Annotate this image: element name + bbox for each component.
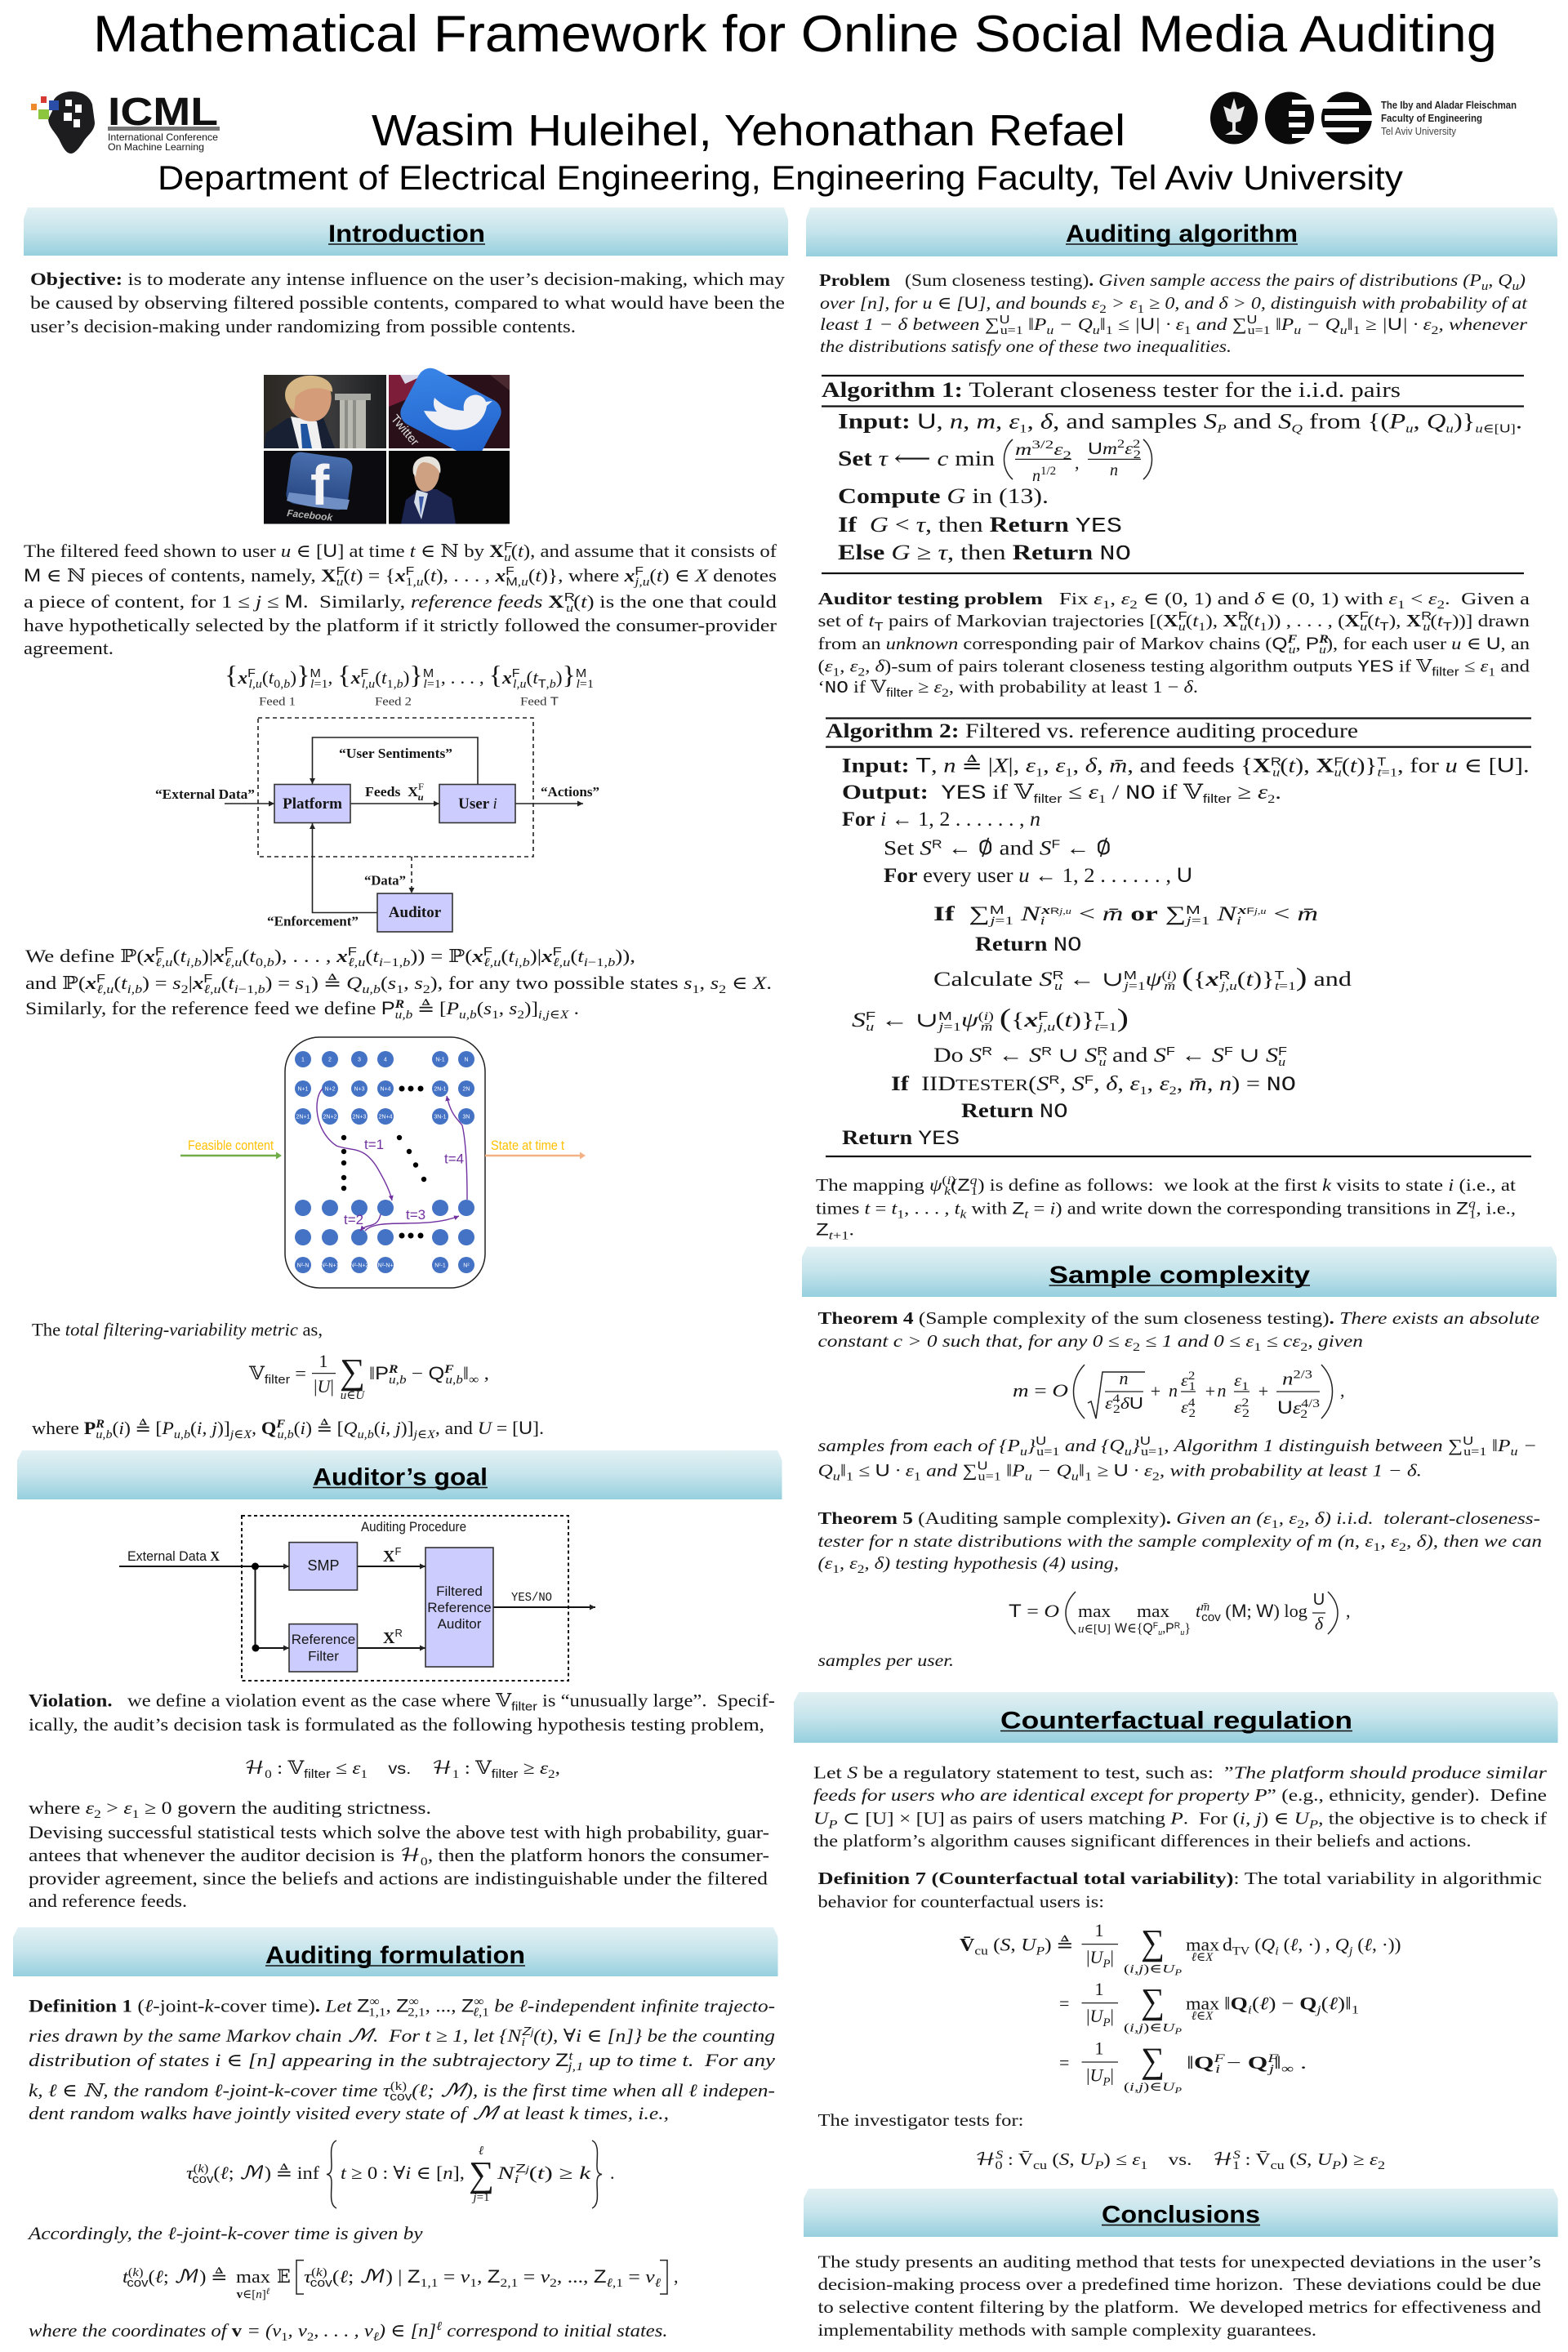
heading: introduction: Introduction xyxy=(328,220,485,247)
text: definition 1: distribution of states i ∈ [n] appearing in the subtrajectory Ztj,1 up to time t. For any xyxy=(29,2050,775,2074)
text: theorem 4: constant c > 0 such that, for any 0 ≤ ε 2 ≤ 1 and 0 ≤ ε 1 ≤ cε 2, given xyxy=(818,1331,1363,1354)
equation: sample complexity m: ε22 xyxy=(1234,1396,1250,1420)
equation: cover time expectation: max xyxy=(236,2266,270,2287)
equation: joint cover time: ∑ xyxy=(469,2154,494,2194)
equation: V filter: 𝕍filter = xyxy=(248,1363,306,1387)
algorithm 2 box: Output: YES if 𝕍 filter ≤ ε1 / NO if 𝕍 filter ≥ ε2. xyxy=(842,782,1281,806)
equation: V filter xyxy=(248,1351,489,1402)
panel: introduction xyxy=(24,207,788,1441)
node labels: 2N+1 xyxy=(296,1114,310,1120)
heading: auditing formulation: Auditing formulation xyxy=(265,1942,525,1969)
equation: joint cover time: . xyxy=(610,2163,614,2183)
equation: V filter: u∈U xyxy=(341,1389,365,1402)
text: violation: ically, the audit’s decision task is formulated as the following hypothesis testing problem, xyxy=(29,1714,764,1735)
panel: conclusions xyxy=(804,2189,1558,2340)
text: samples per user: samples per user. xyxy=(818,1650,954,1670)
equation: counterfactual total variability: = xyxy=(1059,1993,1069,2014)
logo: ICML xyxy=(31,91,220,154)
text: accordingly: Accordingly, the ℓ-joint-k-cover time is given by xyxy=(27,2223,423,2243)
text: theorem 4: Theorem 4 (Sample complexity of the sum closeness testing) . There exists an absolute xyxy=(818,1308,1539,1328)
equation: cover time expectation: t(k)cov(ℓ; ℳ) ≜ xyxy=(122,2266,227,2290)
text: problem statement: least 1 − δ between ∑ Uu=1 ‖P u − Q u‖1 ≤ | U| · ε 1 and ∑ Uu=1 ‖P u − Q u‖1 ≥ | U| · ε 2, whenever xyxy=(820,313,1528,337)
node labels: N+3 xyxy=(354,1086,365,1093)
text: theorem 5: Theorem 5 (Auditing sample complexity) . Given an (ε 1, ε2, δ) i.i.d. tolerant-closeness- xyxy=(818,1508,1540,1531)
equation: sample complexity m xyxy=(1013,1365,1344,1421)
equation: counterfactual total variability xyxy=(960,1920,1401,2096)
algorithm 2 box: Input: T, n ≜ | X|, ε1, ε1, δ, m̄, and feeds { X Ru(t), X Fu(t)} Tt=1, for u ∈ [ U]. xyxy=(842,754,1530,779)
text: regulatory statement: feeds for users who are identical except for property P ” (e.g., ethnicity, gender). Define xyxy=(813,1785,1547,1805)
node labels: 2N-1 xyxy=(434,1086,447,1093)
text: filtered feed definition: M ∈ ℕ pieces of contents, namely, XFu(t) = { xF1,u(t), . . . , xFM,u(t)}, where xFj,u(t) ∈ X denotes xyxy=(24,564,777,589)
heading: auditing algorithm xyxy=(806,207,1557,256)
text: regulatory statement xyxy=(813,1763,1548,1851)
logo: Tel Aviv University xyxy=(1210,91,1517,144)
arrow: state at time t: State at time t xyxy=(491,1138,564,1153)
transition arrows t=1 to t=4: t=2 xyxy=(344,1212,363,1227)
heading: sample complexity xyxy=(802,1246,1557,1297)
node labels: N-1 xyxy=(435,1057,445,1063)
node labels: N²-N+1 xyxy=(321,1263,339,1269)
algorithm 2 box: Set SR ← ∅ and SF ← ∅ xyxy=(884,838,1111,859)
text: mapping definition: The mapping ψ(i)k(Zq1) is define as follows: we look at the first k visits to state i (i.e., at xyxy=(816,1174,1516,1198)
equation: sample complexity m: ε21 xyxy=(1181,1370,1196,1393)
equation: V filter: |U| xyxy=(314,1376,334,1396)
node labels: N²-1 xyxy=(434,1263,446,1269)
equation: sample size T: , xyxy=(1346,1601,1351,1621)
equation: counterfactual total variability: V̄cu (S, UP) ≜ xyxy=(960,1934,1073,1958)
node labels: N+1 xyxy=(297,1086,309,1093)
algorithm 1 box xyxy=(822,376,1524,573)
algorithm 2 box xyxy=(826,719,1531,1156)
equation: sample size T: δ xyxy=(1315,1614,1324,1633)
algorithm 2 box: Calculate SRu ← ∪ Mj=1ψ (i)m̄ ({xRj,u(t)} Tt=1) and xyxy=(933,962,1352,993)
text: conclusions: decision-making process over a predefined time horizon. These deviations could be due xyxy=(818,2274,1541,2294)
text: conclusions: The study presents an auditing method that tests for unexpected deviations in the user’s xyxy=(818,2252,1541,2272)
heading: counterfactual regulation xyxy=(794,1692,1558,1743)
arrow: feasible content: Feasible content xyxy=(188,1138,274,1153)
equation: sample size T: W∈{QFu,PRu} xyxy=(1115,1620,1191,1637)
box: user: User i xyxy=(458,795,497,813)
diagram: platform user auditor block diagram: “Actions” xyxy=(541,784,599,800)
equation: sample size T: max xyxy=(1078,1601,1111,1621)
text: objective xyxy=(30,269,785,336)
equation: sample complexity m: ε42 xyxy=(1181,1396,1196,1420)
algorithm 1 box: Input: U, n, m, ε1, δ, and samples SP and SQ from {( P u, Q u)} u∈[ U]. xyxy=(838,408,1522,436)
algorithm 2 box: S Fu ← ∪ Mj=1ψ (i)m̄ ({x Fj,u(t)} Tt=1) xyxy=(852,1003,1129,1034)
diagram: auditing procedure block diagram xyxy=(119,1516,595,1681)
box: filtered reference auditor: Auditor xyxy=(438,1616,482,1632)
text: auditor testing problem xyxy=(818,589,1530,700)
equation: sample complexity m: Uε4/32 xyxy=(1277,1397,1320,1421)
text: auditor testing problem: from an unknown corresponding pair of Markov chains ( QFu, PRu), for each user u ∈ U, an xyxy=(818,633,1530,657)
text: regulatory statement: UP ⊂ [U] × [U] as pairs of users matching P. For ( i, j) ∈ UP, the objective is to check if xyxy=(813,1809,1547,1832)
equation: joint cover time xyxy=(186,2140,614,2208)
photo: facebook app icon: Facebook xyxy=(287,507,334,523)
text: theorem 5: tester for n state distributions with the sample complexity of m (n, ε 1, ε 2, δ), then we can xyxy=(818,1531,1542,1554)
text: conclusions xyxy=(818,2252,1542,2340)
text: violation xyxy=(29,1690,775,1735)
equation: feed sequence: Feed T xyxy=(520,694,559,709)
text: definition 1 xyxy=(29,1995,775,2123)
equation: sample complexity m: ε42δU xyxy=(1105,1392,1143,1416)
box: platform xyxy=(274,784,350,823)
text: definition 1: Definition 1 (ℓ-joint- k-cover time) . Let Z∞1,1, Z∞2,1, ..., Z∞ℓ,1 be ℓ-independent infinite trajecto- xyxy=(29,1995,775,2019)
algorithm 1 box: Compute G in (13). xyxy=(838,484,1049,508)
equation: counterfactual total variability: ∑ xyxy=(1141,1922,1165,1962)
set tau line with fractions: , xyxy=(1075,452,1080,473)
equation: sample complexity m: + xyxy=(1151,1381,1160,1401)
equation: counterfactual total variability: |UP| xyxy=(1086,2006,1114,2029)
diagram: auditing procedure block diagram: Auditing Procedure xyxy=(361,1519,466,1535)
equation: counterfactual total variability: max xyxy=(1186,1993,1219,2014)
text: objective: user’s decision-making under randomizing from possible contents. xyxy=(30,316,576,336)
equation: feed sequence xyxy=(225,660,594,709)
node labels: N²-N xyxy=(297,1263,309,1269)
diagram: auditing procedure block diagram: YES/NO xyxy=(511,1591,552,1605)
box: SMP: SMP xyxy=(307,1557,340,1574)
set tau line with fractions: Set τ ⟵ c min xyxy=(838,447,995,470)
text: definition 1: ries drawn by the same Markov chain ℳ. For t ≥ 1, let {N iZj(t), ∀i ∈ [n]} be the counting xyxy=(29,2025,775,2049)
node labels: 1 xyxy=(301,1057,305,1063)
algorithm 2 box: If ∑ Mj=1 N ix R j,u < m̄ or ∑ Mj=1 N ix F j,u < m̄ xyxy=(933,903,1318,928)
transition arrows t=1 to t=4: t=4 xyxy=(444,1152,464,1166)
box: user xyxy=(439,784,515,823)
diagram: markov chain state grid xyxy=(180,1037,586,1288)
algorithm 1 box: Else G ≥ τ, then Return NO xyxy=(838,541,1131,566)
equation: V filter: ‖PRu,b − QFu,b‖∞ , xyxy=(369,1363,489,1387)
text: strictness and tests: Devising successful statistical tests which solve the above test with high probability, guar- xyxy=(29,1822,769,1842)
logo: ICML: ICML xyxy=(108,91,218,134)
text: filtered feed definition xyxy=(24,540,777,658)
text: strictness and tests: and reference feeds. xyxy=(29,1891,187,1911)
heading: auditor's goal xyxy=(17,1450,782,1499)
text: filtered feed definition: The filtered feed shown to user u ∈ [U] at time t ∈ ℕ by XFu(t), and assume that it consists of xyxy=(24,540,777,564)
equation: cover time expectation: v∈[n]ℓ xyxy=(237,2287,270,2301)
node labels: N² xyxy=(463,1263,470,1269)
photo: facebook app icon xyxy=(264,451,386,524)
diagram: auditing procedure block diagram: XR xyxy=(383,1627,403,1647)
equation: counterfactual total variability: 1 xyxy=(1094,2038,1104,2058)
diagram: platform user auditor block diagram: “Data” xyxy=(364,872,406,889)
equation: feed sequence: {xFl,u(t0,b)}Ml=1, {xFl,u(t1,b)}Ml=1, . . . , {xFl,u(tT,b)}Ml=1 xyxy=(225,660,594,691)
equation: counterfactual total variability: ∑ xyxy=(1141,1981,1165,2021)
affiliation: Department of Electrical Engineering, Engineering Faculty, Tel Aviv University xyxy=(158,158,1403,197)
text: problem statement xyxy=(819,270,1528,356)
heading: auditor's goal: Auditor’s goal xyxy=(313,1463,488,1491)
equation: cover time expectation xyxy=(122,2261,678,2301)
algorithm 2 box: Return NO xyxy=(975,933,1081,957)
logo: Tel Aviv University: Tel Aviv University xyxy=(1381,125,1456,137)
node labels: N²-N+2 xyxy=(350,1263,368,1269)
box: reference filter: Reference xyxy=(292,1632,355,1647)
text: auditor testing problem: Auditor testing problem Fix ε1, ε2 ∈ (0, 1) and δ ∈ (0, 1) with ε1 < ε2. Given a xyxy=(818,589,1530,612)
node labels xyxy=(296,1057,470,1269)
text: objective: Objective: is to moderate any intense influence on the user’s decision-making, which may xyxy=(30,269,785,289)
node labels: 3 xyxy=(358,1057,361,1063)
equation: counterfactual total variability: 1 xyxy=(1094,1979,1104,1999)
heading: counterfactual regulation: Counterfactual regulation xyxy=(1000,1707,1352,1735)
heading: conclusions: Conclusions xyxy=(1102,2202,1260,2229)
text: problem statement: over [n], for u ∈ [ U], and bounds ε 2 > ε 1 ≥ 0, and δ > 0, distinguish with probability of at xyxy=(820,293,1528,316)
algorithm 1 box: If G < τ, then Return YES xyxy=(838,513,1122,538)
heading: conclusions xyxy=(804,2189,1558,2237)
authors: Wasim Huleihel, Yehonathan Refael xyxy=(372,106,1125,155)
node labels: N²-N+3 xyxy=(378,1263,396,1269)
set tau line with fractions: n xyxy=(1110,461,1118,479)
text: theorem 5 xyxy=(818,1508,1542,1576)
text: definition 7: behavior for counterfactual users is: xyxy=(818,1892,1104,1912)
set tau line with fractions: n1/2 xyxy=(1032,465,1056,485)
diagram: platform user auditor block diagram: Feeds XF u xyxy=(365,781,424,803)
diagram: platform user auditor block diagram: “External Data” xyxy=(155,786,255,802)
algorithm 2 box: For i ← 1, 2 . . . . . . , n xyxy=(842,808,1040,831)
photo: facebook app icon: f xyxy=(310,453,330,517)
node labels: N+2 xyxy=(324,1086,336,1093)
text: total filtering variability: The total filtering-variability metric as, xyxy=(32,1320,323,1339)
heading: auditing formulation xyxy=(13,1927,777,1976)
node labels: N xyxy=(464,1057,469,1063)
equation: counterfactual total variability: |UP| xyxy=(1086,1947,1114,1971)
text: violation: Violation. we define a violation event as the case where 𝕍 filter is “unusually large”. Specif- xyxy=(29,1690,775,1714)
box: platform: Platform xyxy=(283,795,342,813)
equation: joint cover time: t ≥ 0 : ∀ i ∈ [n], xyxy=(341,2163,465,2183)
text: investigator tests: The investigator tests for: xyxy=(818,2110,1024,2130)
heading: sample complexity: Sample complexity xyxy=(1049,1262,1310,1289)
heading: auditing algorithm: Auditing algorithm xyxy=(1066,220,1298,247)
panel: sample complexity xyxy=(802,1246,1557,1670)
text: auditor testing problem: set of tT pairs of Markovian trajectories [( XFu(t1), XRu(t1)) , . . . , ( XFu(tT), XRu(tT))] drawn xyxy=(818,609,1530,634)
text: samples from each: samples from each of {P u}Uu=1 and {Q u}Uu=1, Algorithm 1 distinguish between ∑ Uu=1 ‖P u − xyxy=(818,1434,1537,1459)
panel: auditing formulation xyxy=(13,1927,777,2344)
algorithm 2 box: Return YES xyxy=(842,1127,960,1151)
equation: sample size T: max xyxy=(1137,1601,1169,1621)
box: reference filter: Filter xyxy=(308,1649,339,1664)
box: filtered reference auditor: Reference xyxy=(427,1600,492,1615)
panel: auditor's goal xyxy=(17,1450,782,1911)
text: filtered feed definition: a piece of content, for 1 ≤ j ≤ M. Similarly, reference feeds XRu(t) is the one that could xyxy=(24,590,777,615)
equation: feed sequence: Feed 1 xyxy=(259,696,296,709)
equation: V filter: 1 xyxy=(318,1351,328,1371)
logo: Tel Aviv University: Faculty of Engineering xyxy=(1381,112,1482,124)
photo: twitter app icon: Twitter xyxy=(388,412,421,448)
logo: ICML: On Machine Learning xyxy=(108,141,204,153)
equation: sample size T: tm̄cov (M; W) log xyxy=(1196,1601,1307,1624)
text: transition probabilities: We define ℙ( xFℓ,u(ti,b)|xFℓ,u(t0,b), . . . , xFℓ,u(ti−1, b)) = ℙ( xFℓ,u(ti,b)|xFℓ,u(ti−1, b)), xyxy=(25,945,635,969)
algorithm 2 box: Return NO xyxy=(961,1100,1068,1124)
logo: ICML: International Conference xyxy=(108,131,218,143)
box: auditor: Auditor xyxy=(389,904,442,921)
equation: sample size T: U xyxy=(1313,1591,1325,1609)
transition arrows t=1 to t=4 xyxy=(317,1089,467,1231)
equation: hypotheses: ℋ0 : 𝕍 filter ≤ ε1 vs. ℋ 1 : 𝕍 filter ≥ ε2, xyxy=(244,1757,560,1781)
text: mapping definition: times t = t1, . . . , tk with Zt = i) and write down the corresponding transitions in Zq1, i.e., xyxy=(816,1198,1516,1222)
text: initial states: where the coordinates of v = (v 1, v2, . . . , v ℓ) ∈ [n] ℓ correspond to initial states. xyxy=(29,2320,668,2344)
diagram: platform user auditor block diagram: “Enforcement” xyxy=(267,913,359,929)
text: problem statement: Problem (Sum closeness testing) . Given sample access the pairs of distributions (P u, Qu) xyxy=(819,270,1526,293)
node labels: 4 xyxy=(384,1057,387,1063)
diagram: platform user auditor block diagram: “User Sentiments” xyxy=(339,746,452,761)
text: strictness and tests: provider agreement, since the beliefs and actions are indistinguishable under the filtered xyxy=(29,1869,768,1888)
set tau line with fractions xyxy=(838,438,1152,485)
box: filtered reference auditor xyxy=(425,1548,493,1667)
text: definition 1: k, ℓ ∈ ℕ, the random ℓ-joint-k-cover time τ (k)cov(ℓ; ℳ), is the first time when all ℓ indepen- xyxy=(29,2080,775,2104)
equation: counterfactual total variability: max xyxy=(1186,1934,1219,1955)
equation: counterfactual total variability: ℓ∈X xyxy=(1192,1951,1214,1964)
equation: sample size T: T = O xyxy=(1009,1601,1059,1621)
box: auditor xyxy=(377,893,452,932)
diagram: platform user auditor block diagram xyxy=(155,718,599,932)
text: mapping definition: Zt+1. xyxy=(816,1220,854,1243)
photo: twitter app icon xyxy=(388,363,510,461)
photo: man at lectern xyxy=(264,375,386,448)
state nodes xyxy=(295,1051,474,1273)
transition arrows t=1 to t=4: t=1 xyxy=(364,1137,384,1152)
node labels: 2N xyxy=(463,1086,470,1093)
equation: counterfactual total variability: ℓ∈X xyxy=(1192,2010,1214,2023)
node labels: 2N+4 xyxy=(379,1114,393,1120)
set tau line with fractions: m 3/2 ε2 xyxy=(1015,439,1071,462)
panel: auditing algorithm xyxy=(806,207,1557,1243)
text: objective: be caused by observing filtered possible contents, compared to what would have been the xyxy=(30,292,785,313)
equation: counterfactual total variability: ∑ xyxy=(1141,2040,1165,2081)
text: samples from each xyxy=(818,1434,1537,1484)
equation: sample size T xyxy=(1009,1591,1351,1637)
text: filtered feed definition: have hypothetically selected by the platform if it strictly followed the consumer-provider xyxy=(24,615,777,635)
photo: man in dark suit xyxy=(389,451,510,524)
equation: counterfactual total variability: 1 xyxy=(1094,1920,1104,1940)
equation: sample complexity m: + xyxy=(1205,1381,1215,1401)
equation: sample size T: u∈[U] xyxy=(1078,1622,1111,1636)
equation: investigator hypotheses: ℋ S0 : V̄ cu (S, UP) ≤ ε1 vs. ℋ S1 : V̄ cu (S, UP) ≥ ε2 xyxy=(975,2149,1385,2172)
equation: counterfactual total variability: (i,j )∈ U P xyxy=(1124,2022,1182,2037)
equation: sample complexity m: n xyxy=(1169,1380,1178,1401)
equation: counterfactual total variability: = xyxy=(1059,2052,1069,2073)
node labels: 2 xyxy=(328,1057,332,1063)
panel: counterfactual regulation xyxy=(794,1692,1558,2172)
equation: sample complexity m: m = O xyxy=(1013,1380,1068,1401)
heading: introduction xyxy=(24,207,788,256)
text: definition 1: dent random walks have jointly visited every state of ℳ at least k times, i.e., xyxy=(29,2103,669,2123)
equation: counterfactual total variability: |UP| xyxy=(1086,2065,1114,2089)
text: strictness and tests: where ε2 > ε1 ≥ 0 govern the auditing strictness. xyxy=(29,1797,431,1821)
text: filtered feed definition: agreement. xyxy=(24,638,114,658)
equation: cover time expectation: , xyxy=(674,2266,678,2287)
arrow: state at time t xyxy=(485,1138,586,1160)
node labels: N+4 xyxy=(380,1086,391,1093)
text: conclusions: implementability methods with sample complexity guarantees. xyxy=(818,2320,1316,2340)
text: theorem 4 xyxy=(818,1308,1539,1354)
node labels: 3N-1 xyxy=(434,1114,447,1120)
text: transition probabilities xyxy=(25,945,772,1022)
algorithm 2 box: Algorithm 2: Filtered vs. reference auditing procedure xyxy=(826,720,1358,742)
text: regulatory statement: the platform’s algorithm causes significant differences in their beliefs and actions. xyxy=(813,1831,1472,1851)
text: transition probabilities: and ℙ( xFℓ,u(ti,b) = s2|xFℓ,u(ti−1, b) = s1) ≜ Qu,b(s1, s2), for any two possible states s1, s2 ∈ X. xyxy=(25,972,772,996)
text: auditor testing problem: (ε1, ε2, δ)-sum of pairs tolerant closeness testing algorithm outputs YES if 𝕍 filter ≤ ε1 and xyxy=(818,657,1530,679)
text: mapping definition xyxy=(816,1174,1516,1243)
equation: joint cover time: j=1 xyxy=(471,2191,490,2204)
text: auditor testing problem: ‘NO if 𝕍 filter ≥ ε2, with probability at least 1 − δ. xyxy=(818,677,1198,700)
set tau line with fractions: Um2ε22 xyxy=(1088,438,1141,461)
algorithm 2 box: If IID TESTER (SR, SF, δ, ε1, ε2, m̄, n) = NO xyxy=(891,1073,1296,1098)
text: conclusions: to selective content filtering by the platform. We developed metrics for effectiveness and xyxy=(818,2297,1542,2317)
equation: sample complexity m: ε1 xyxy=(1234,1372,1249,1393)
node labels: 3N xyxy=(463,1114,470,1120)
ellipsis dots xyxy=(341,1086,426,1238)
text: theorem 5: (ε1, ε2, δ) testing hypothesis (4) using, xyxy=(818,1553,1119,1576)
equation: sample complexity m: n2/3 xyxy=(1282,1369,1312,1388)
arrow: feasible content xyxy=(180,1138,282,1160)
box: filtered reference auditor: Filtered xyxy=(436,1584,483,1599)
title: Mathematical Framework for Online Social Media Auditing xyxy=(93,6,1497,63)
text: transition probabilities: Similarly, for the reference feed we define PRu,b ≜ [ Pu,b(s1, s2)]i,j∈X . xyxy=(25,998,579,1022)
text: strictness and tests xyxy=(29,1797,769,1911)
text: samples from each: Qu‖1 ≤ U · ε 1 and ∑ Uu=1 ‖P u − Q u‖1 ≥ U · ε 2, with probability at least 1 − δ. xyxy=(818,1459,1422,1484)
transition arrows t=1 to t=4: t=3 xyxy=(406,1207,425,1223)
equation: counterfactual total variability: (i,j )∈ U P xyxy=(1124,1963,1182,1978)
text: definition 7: Definition 7 (Counterfactual total variability) : The total variability in algorithmic xyxy=(818,1869,1542,1888)
equation: counterfactual total variability: ‖Q i(ℓ) − Q j(ℓ)‖1 xyxy=(1224,1993,1359,2017)
text: problem statement: the distributions satisfy one of these two inequalities. xyxy=(820,336,1232,356)
equation: cover time expectation: 𝔼 xyxy=(277,2266,291,2287)
equation: feed sequence: Feed 2 xyxy=(375,696,412,709)
diagram: auditing procedure block diagram: External Data X xyxy=(127,1548,220,1564)
text: definition 7 xyxy=(818,1869,1542,1912)
logo: Tel Aviv University: The Iby and Aladar Fleischman xyxy=(1381,99,1517,111)
equation: joint cover time: τ(k)cov(ℓ; ℳ) ≜ inf xyxy=(186,2163,320,2186)
node labels: 2N+2 xyxy=(323,1114,337,1120)
equation: V filter: ∑ xyxy=(340,1352,365,1392)
equation: counterfactual total variability: (i,j )∈ U P xyxy=(1124,2081,1182,2096)
equation: sample complexity m: + xyxy=(1258,1381,1268,1401)
algorithm 2 box: For every user u ← 1, 2 . . . . . . , U xyxy=(884,864,1192,887)
equation: cover time expectation: τ(k)cov(ℓ; ℳ) | Z1,1 = v1, Z2,1 = v2, ..., Zℓ,1 = vℓ xyxy=(304,2266,661,2290)
equation: counterfactual total variability: ‖Q Fi − Q Fj‖∞ . xyxy=(1187,2052,1307,2076)
diagram: auditing procedure block diagram: XF xyxy=(383,1545,401,1566)
box: reference filter xyxy=(289,1624,358,1672)
equation: sample complexity m: , xyxy=(1340,1380,1344,1401)
equation: sample complexity m: n xyxy=(1119,1368,1129,1388)
text: regulatory statement: Let S be a regulatory statement to test, such as: ” The platform should produce similar xyxy=(813,1763,1548,1783)
algorithm 1 box: Algorithm 1: Tolerant closeness tester for the i.i.d. pairs xyxy=(822,378,1401,402)
text: where definitions: where PRu,b(i) ≜ [Pu,b(i, j)]j∈X, QFu,b(i) ≜ [Qu,b(i, j)]j∈X, and U = [U]. xyxy=(32,1418,544,1441)
text: strictness and tests: antees that whenever the auditor decision is ℋ 0, then the platform honors the consumer- xyxy=(29,1845,769,1869)
equation: joint cover time: ℓ xyxy=(479,2145,483,2158)
node labels: 2N+3 xyxy=(353,1114,367,1120)
equation: sample complexity m: n xyxy=(1217,1380,1227,1401)
box: SMP xyxy=(289,1543,358,1590)
equation: counterfactual total variability: dTV (Qi (ℓ, ·) , Qj (ℓ, ·)) xyxy=(1223,1934,1401,1958)
equation: joint cover time: N iZ j(t) ≥ k xyxy=(497,2162,592,2186)
image collage: politicians and social media xyxy=(264,363,510,524)
algorithm 2 box: Do SR ← SR ∪ SRu and SF ← SF ∪ SFu xyxy=(933,1045,1287,1069)
